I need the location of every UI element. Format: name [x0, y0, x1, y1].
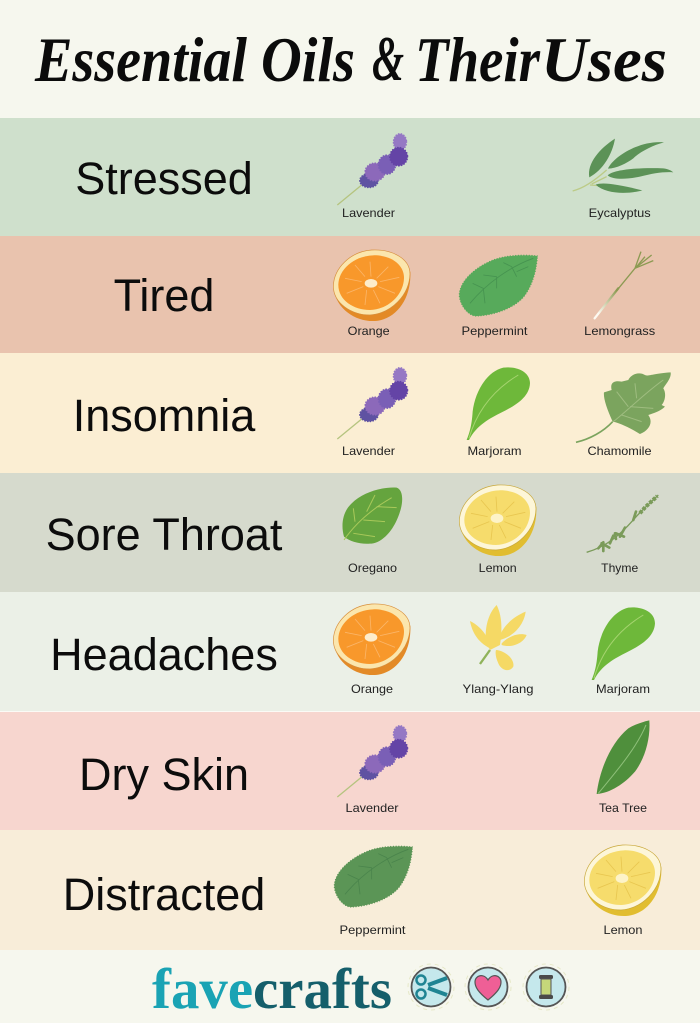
- icon: lemon: [584, 845, 661, 916]
- icon: heart badge: [465, 964, 511, 1010]
- label: tea tree: Tea Tree: [599, 801, 647, 815]
- heading: tired: Tired: [114, 270, 214, 321]
- label: orange: Orange: [351, 682, 393, 696]
- icon: lavender: [337, 726, 407, 797]
- label: lavender: Lavender: [346, 801, 398, 815]
- title: &: [372, 23, 404, 94]
- heading: headaches: Headaches: [50, 629, 278, 680]
- panel: dry skin: [0, 712, 700, 830]
- icon: orange: [333, 250, 410, 321]
- footer logo: [152, 958, 569, 1021]
- label: lemon: Lemon: [479, 561, 517, 575]
- icon: spool badge: [523, 964, 569, 1010]
- icon: lemon: [459, 485, 536, 556]
- title: [34, 23, 667, 95]
- label: lavender: Lavender: [342, 206, 395, 220]
- label: peppermint: Peppermint: [340, 923, 406, 937]
- icon: orange: [333, 604, 410, 675]
- panel: stressed: [0, 118, 700, 236]
- label: thyme: Thyme: [601, 561, 639, 575]
- icon: peppermint: [334, 846, 412, 907]
- panel: insomnia: [0, 353, 700, 473]
- icon: chamomile: [576, 372, 671, 442]
- panel: tired: [0, 236, 700, 353]
- panel: headaches: [0, 592, 700, 711]
- panel: distracted: [0, 830, 700, 950]
- label: marjoram: Marjoram: [596, 682, 650, 696]
- logo wordmark: favecrafts: [152, 958, 392, 1021]
- icon: lemongrass: [595, 252, 653, 318]
- heading: dry skin: Dry Skin: [79, 749, 249, 800]
- icon: thyme: [587, 495, 658, 552]
- icon: tea tree: [597, 720, 649, 794]
- label: marjoram: Marjoram: [468, 444, 522, 458]
- icon: oregano: [342, 488, 402, 544]
- label: lemongrass: Lemongrass: [584, 324, 655, 338]
- label: lavender: Lavender: [342, 444, 395, 458]
- heading: stressed: Stressed: [75, 153, 253, 204]
- heading: insomnia: Insomnia: [73, 390, 256, 441]
- title: Essential: [34, 24, 247, 95]
- panel: sore throat: [0, 473, 700, 592]
- icon: lavender: [337, 134, 407, 205]
- divider gap: [0, 711, 700, 712]
- icon: ylang-ylang: [470, 605, 527, 670]
- icon: marjoram: [592, 607, 655, 680]
- heading: sore throat: Sore Throat: [46, 509, 283, 560]
- label: chamomile: Chamomile: [588, 444, 652, 458]
- label: ylang-ylang: Ylang-Ylang: [462, 682, 534, 696]
- title: Uses: [541, 24, 667, 95]
- icon: eucalyptus: [573, 139, 673, 193]
- icon: lavender: [337, 368, 407, 439]
- icon: peppermint: [459, 255, 537, 316]
- heading: distracted: Distracted: [63, 869, 265, 920]
- icon: marjoram: [467, 367, 530, 440]
- title: Oils: [261, 24, 355, 95]
- label: oregano: Oregano: [348, 561, 397, 575]
- label: eucalyptus: Eycalyptus: [589, 206, 651, 220]
- title: Their: [415, 24, 541, 95]
- label: orange: Orange: [348, 324, 390, 338]
- icon: scissors badge: [408, 964, 454, 1010]
- label: peppermint: Peppermint: [462, 324, 528, 338]
- label: lemon: Lemon: [604, 923, 642, 937]
